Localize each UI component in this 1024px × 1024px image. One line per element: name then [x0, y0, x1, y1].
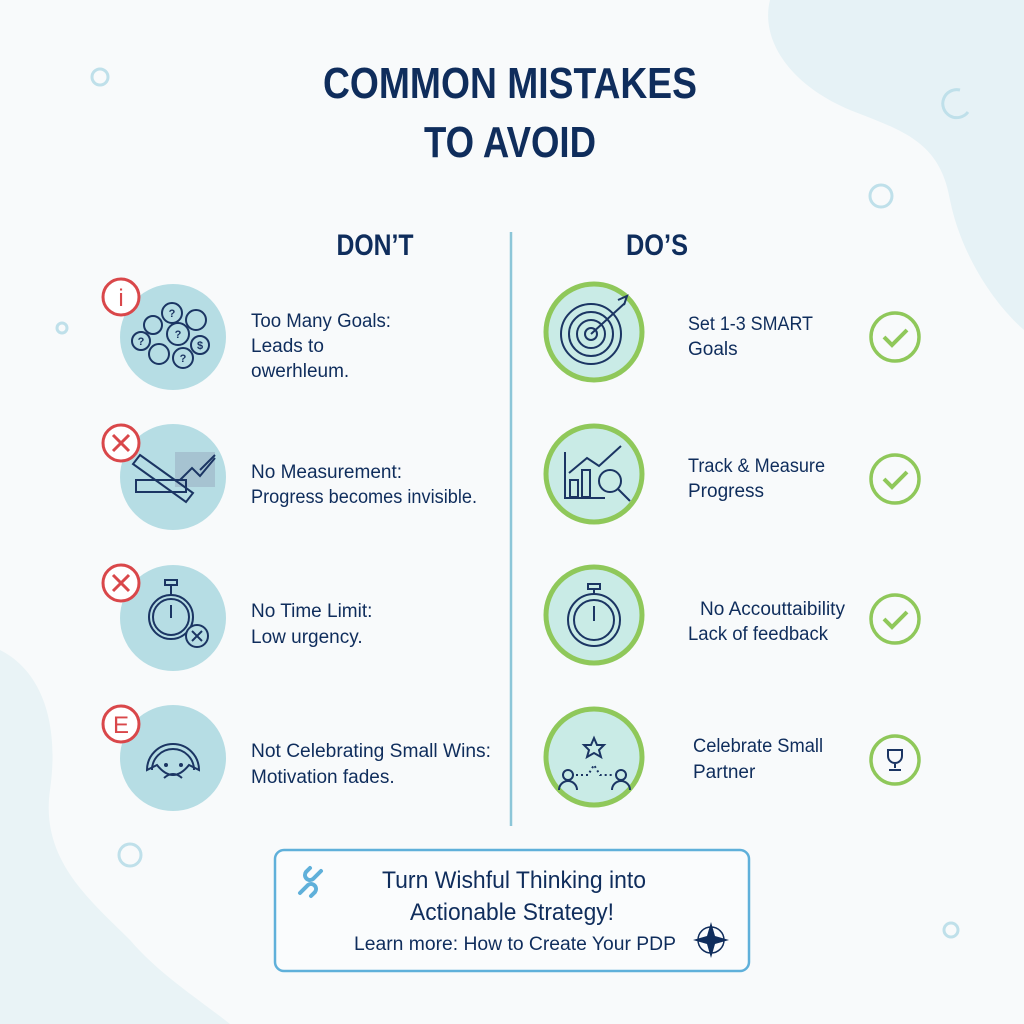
- text: too many goals: [251, 311, 391, 382]
- icon: no time limit: [103, 565, 226, 671]
- background blob bottom-left: [0, 650, 230, 1024]
- text: set smart goals: [688, 314, 813, 360]
- text: track & measure: Progress: [688, 481, 764, 502]
- heading: do's: DO’S: [626, 229, 688, 262]
- icon: too many goals: $: [197, 340, 203, 352]
- icon: too many goals: [103, 279, 226, 390]
- divider: [510, 232, 512, 826]
- text: not celebrating: Not Celebrating Small Wins:: [251, 741, 491, 762]
- text: too many goals: Too Many Goals:: [251, 311, 391, 332]
- icon: not celebrating: [103, 705, 226, 811]
- icon: too many goals: ?: [175, 329, 182, 341]
- icon: compass star: [693, 922, 729, 958]
- text: no time limit: No Time Limit:: [251, 601, 372, 622]
- title: TO AVOID: [424, 118, 596, 167]
- text: no measurement: [251, 462, 477, 508]
- text: too many goals: Leads to: [251, 336, 324, 357]
- text: accountability: Lack of feedback: [688, 624, 828, 645]
- icon: trophy: [871, 736, 919, 784]
- icon: target: [546, 284, 642, 380]
- text: accountability: [688, 599, 845, 645]
- text: celebrate small partner: [693, 736, 823, 783]
- icon: too many goals: ?: [180, 353, 187, 365]
- text: accountability: No Accouttaibility: [700, 599, 845, 620]
- icon: not celebrating: E: [113, 712, 129, 739]
- icon: too many goals: ?: [169, 308, 176, 320]
- text: not celebrating: [251, 741, 491, 788]
- text: set smart goals: Set 1-3 SMART: [688, 314, 813, 335]
- title: COMMON MISTAKES: [323, 59, 697, 108]
- decorative sparkles: [57, 69, 968, 937]
- text: too many goals: owerhleum.: [251, 361, 349, 382]
- icon: link: [300, 868, 321, 896]
- text: celebrate small partner: Partner: [693, 762, 756, 783]
- icon: celebrate partner: [546, 709, 642, 805]
- icon: stopwatch: [546, 567, 642, 663]
- text: no time limit: [251, 601, 372, 648]
- title: [323, 59, 697, 167]
- icon: no measurement: [103, 424, 226, 530]
- text: celebrate small partner: Celebrate Small: [693, 736, 823, 757]
- callout text: [354, 867, 676, 955]
- callout box: [275, 850, 749, 971]
- icon: chart magnifier: [546, 426, 642, 522]
- icon: check 2: [871, 455, 919, 503]
- callout text: Learn more: How to Create Your PDP: [354, 934, 676, 955]
- icon: too many goals: i: [118, 285, 124, 312]
- text: track & measure: [688, 456, 825, 502]
- callout text: Actionable Strategy!: [410, 899, 614, 926]
- text: no time limit: Low urgency.: [251, 627, 363, 648]
- text: track & measure: Track & Measure: [688, 456, 825, 477]
- heading: don't: DON’T: [336, 229, 414, 262]
- background blob top-right: [768, 0, 1024, 330]
- text: no measurement: Progress becomes invisible.: [251, 487, 477, 508]
- callout text: Turn Wishful Thinking into: [382, 867, 646, 894]
- icon: too many goals: ?: [138, 336, 145, 348]
- panel: do's items: [546, 284, 919, 805]
- text: set smart goals: Goals: [688, 339, 738, 360]
- text: not celebrating: Motivation fades.: [251, 767, 395, 788]
- panel: don't items: [103, 279, 491, 811]
- icon: check 3: [871, 595, 919, 643]
- icon: check 1: [871, 313, 919, 361]
- text: no measurement: No Measurement:: [251, 462, 402, 483]
